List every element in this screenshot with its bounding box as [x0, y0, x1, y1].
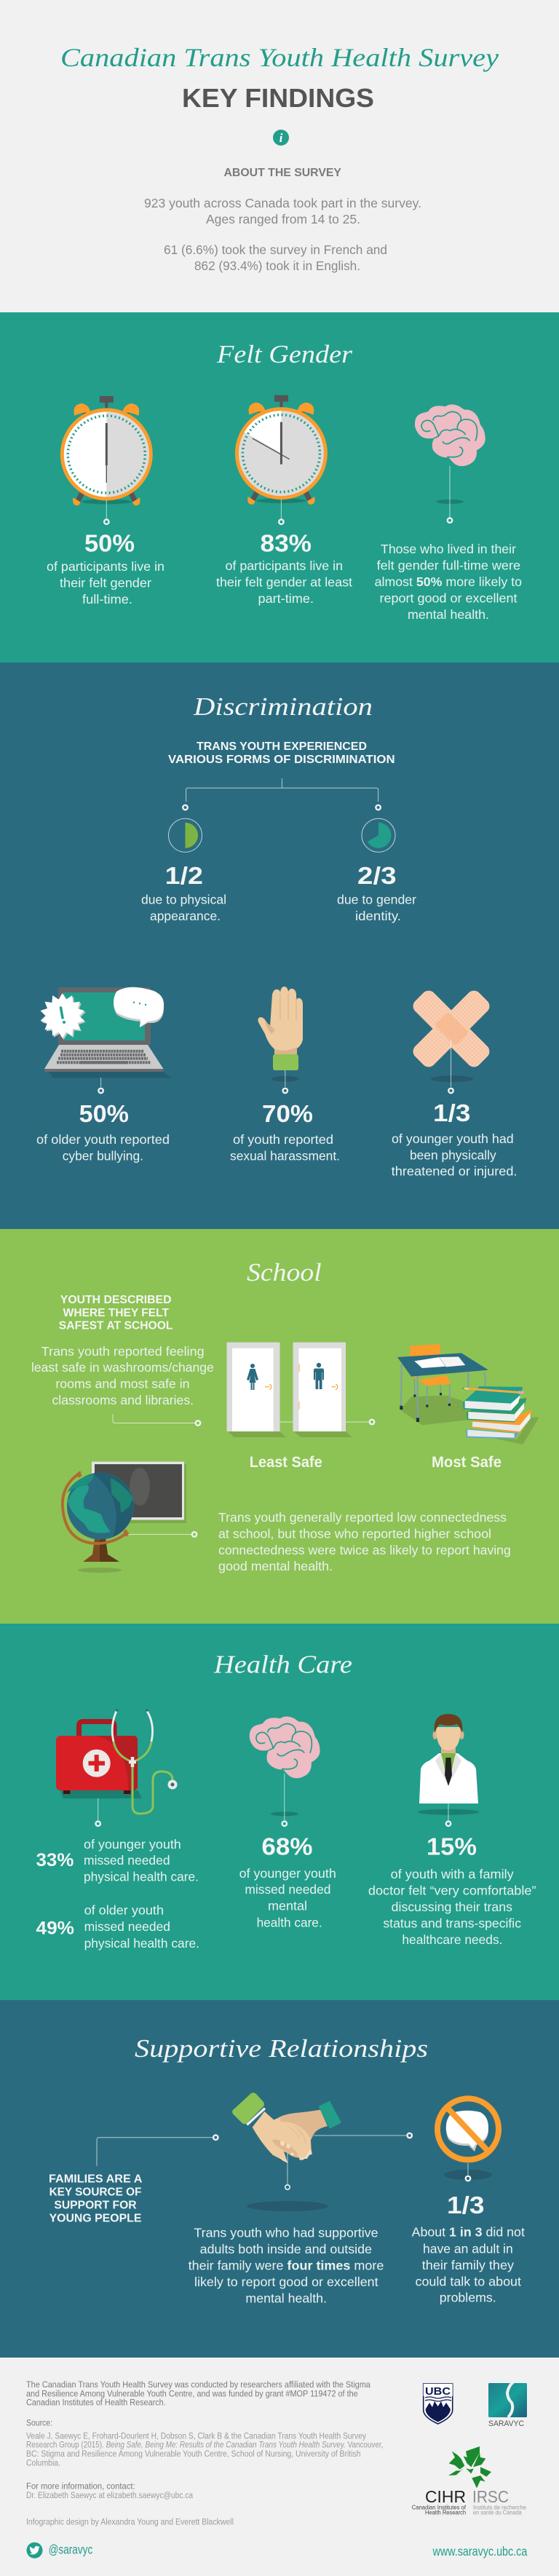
stat: 49% older youth: of older youth: [84, 1903, 164, 1918]
subtitle: key findings: KEY FINDINGS: [182, 83, 374, 113]
text: contact: For more information, contact:: [26, 2481, 135, 2492]
logo: CIHR IRSC: CIHR: [425, 2487, 466, 2506]
stat: 15%: doctor felt “very comfortable”: [368, 1884, 536, 1898]
connector: [98, 1078, 103, 1093]
stat: 2/3: 2/3: [357, 862, 397, 889]
panel: footer: [0, 2358, 559, 2576]
stat: 50%: their felt gender: [60, 576, 151, 590]
stat: 1/3: [392, 1099, 518, 1179]
about the survey text: Ages ranged from 14 to 25.: [206, 212, 360, 226]
icon: twitter: [26, 2543, 42, 2559]
stat: 1/2: due to physical: [141, 893, 226, 907]
stat: 50%: of participants live in: [47, 559, 164, 574]
connector: tree: [183, 778, 381, 810]
connector: [104, 500, 109, 524]
about the survey text: [144, 196, 421, 273]
panel: discrimination: [0, 663, 559, 1229]
stat: 83%: of participants live in: [226, 558, 343, 573]
text: safest places: [31, 1344, 214, 1407]
logo: CIHR IRSC: IRSC: [472, 2487, 509, 2506]
logo: CIHR IRSC: en santé du Canada: [473, 2509, 522, 2516]
stat: 49% older youth: [36, 1903, 199, 1951]
text: funding statement: [26, 2379, 370, 2408]
text: source: Research Group (2015). Being Safe, Being Me: Results of the Canadian Trans Youth Health Survey. Vancouver,: [26, 2440, 383, 2450]
icon: handshake: [232, 2093, 341, 2162]
chart: one half pie: [169, 818, 202, 852]
stat: 68%: of younger youth: [239, 1866, 336, 1881]
label: least safe: Least Safe: [250, 1454, 322, 1471]
stat: 1/3: threatened or injured.: [392, 1164, 518, 1179]
text: mental health finding: mental health.: [408, 607, 489, 622]
stat: 68%: health care.: [257, 1915, 322, 1929]
stat: 1/3: 1/3: [447, 2192, 485, 2219]
stat: 1/2: appearance.: [150, 909, 221, 923]
stat: 1/3: 1/3: [433, 1099, 470, 1126]
subheading: TRANS YOUTH EXPERIENCED: [197, 740, 367, 753]
connector: [128, 1532, 197, 1537]
panel: health care: [0, 1624, 559, 2000]
stat: 83%: part-time.: [258, 591, 314, 606]
stat: 33% younger youth: of younger youth: [84, 1837, 181, 1852]
panel: felt gender: [0, 312, 559, 663]
stat: 33% younger youth: physical health care.: [84, 1870, 199, 1884]
label: most safe: Most Safe: [432, 1454, 501, 1471]
subheading: families: YOUNG PEOPLE: [49, 2212, 141, 2224]
text: source: Source:: [26, 2418, 52, 2428]
text: connectedness finding: connectedness were twice as likely to report having: [218, 1543, 511, 1557]
text: safest places: least safe in washrooms/change: [31, 1360, 214, 1375]
text: source: Veale J, Saewyc E, Frohard-Dourlent H, Dobson S, Clark B & the Canadian Trans Youth Health Survey: [26, 2430, 367, 2441]
icon: clock half white: [62, 396, 151, 505]
icon: info: [273, 130, 289, 146]
subheading: families: KEY SOURCE OF: [49, 2186, 141, 2198]
stat: 1/3: their family they: [422, 2258, 514, 2272]
icon: doctor: [418, 1714, 479, 1815]
chart: two thirds pie: [362, 818, 395, 852]
about the survey text: 862 (93.4%) took it in English.: [194, 258, 360, 273]
subheading: SAFEST AT SCHOOL: [59, 1320, 173, 1332]
stat: 15%: [368, 1833, 536, 1947]
stat: 15%: discussing their trans: [392, 1900, 512, 1914]
stat: 50%: [47, 530, 164, 607]
logo: UBC: [424, 2384, 453, 2424]
stat: 2/3: due to gender: [337, 893, 416, 907]
text: connectedness finding: [218, 1510, 511, 1573]
connector: [97, 2135, 218, 2166]
text: source: [26, 2418, 383, 2468]
text: connectedness finding: at school, but those who reported higher school: [218, 1526, 491, 1541]
icon: clock 83 percent: [237, 395, 325, 504]
stat: 1/3: could talk to about: [415, 2274, 521, 2288]
subheading: families: FAMILIES ARE A: [49, 2173, 142, 2185]
text: mental health finding: report good or excellent: [380, 591, 518, 606]
heading: discrimination: Discrimination: [193, 692, 373, 721]
text: connectedness finding: good mental health.: [218, 1559, 333, 1573]
text: funding statement: The Canadian Trans Youth Health Survey was conducted by researchers affiliated with the Stigma: [26, 2379, 370, 2390]
text: mental health finding: almost 50% more likely to: [375, 574, 522, 589]
stat: 50% cyber bullying: 50%: [79, 1100, 129, 1127]
subheading: [168, 740, 395, 766]
stat: 49% older youth: physical health care.: [84, 1936, 199, 1951]
text: contact: [26, 2481, 193, 2500]
connector: [279, 499, 284, 524]
text: contact: Dr. Elizabeth Saewyc at elizabeth.saewyc@ubc.ca: [26, 2490, 193, 2500]
stat: 70%: 70%: [262, 1100, 313, 1127]
connector: [271, 1774, 298, 1826]
stat: 83%: [216, 530, 352, 606]
stat: 15%: of youth with a family: [391, 1867, 514, 1881]
stat: 1/3: problems.: [440, 2291, 496, 2305]
about the survey text: 61 (6.6%) took the survey in French and: [164, 242, 387, 257]
connector: [113, 1414, 200, 1426]
connector: [283, 1070, 288, 1093]
logo: UBC: UBC: [425, 2385, 451, 2398]
logo: SARAVYC: SARAVYC: [488, 2419, 524, 2428]
stat: 33% younger youth: missed needed: [84, 1853, 170, 1868]
panel: school: [0, 1229, 559, 1624]
text: funding statement: Canadian Institutes of Health Research.: [26, 2398, 166, 2408]
subheading: families: [49, 2173, 142, 2224]
subheading: VARIOUS FORMS OF DISCRIMINATION: [168, 754, 395, 766]
text: four times finding: adults both inside and outside: [200, 2242, 372, 2256]
stat: 50%: full-time.: [82, 592, 132, 607]
logo: CIHR IRSC: [412, 2446, 526, 2516]
icon: laptop with alerts: [40, 987, 171, 1078]
text: connectedness finding: Trans youth generally reported low connectedness: [218, 1510, 507, 1525]
stat: 33% younger youth: 33%: [36, 1850, 74, 1870]
subheading: YOUTH DESCRIBED: [60, 1294, 172, 1306]
stat: 1/2: [141, 862, 226, 923]
stat: 2/3: identity.: [355, 909, 401, 923]
stat: 50%: 50%: [84, 530, 135, 557]
connector: [446, 1803, 451, 1826]
stat: 49% older youth: 49%: [36, 1919, 74, 1939]
heading: health care: Health Care: [213, 1651, 352, 1679]
text: mental health finding: felt gender full-time were: [377, 558, 520, 572]
connector: [448, 1040, 453, 1093]
about the survey text: 923 youth across Canada took part in the survey.: [144, 196, 421, 210]
heading: felt gender: Felt Gender: [216, 340, 352, 368]
stat: 1/2: 1/2: [165, 862, 203, 889]
heading: school: School: [247, 1258, 322, 1287]
stat: 1/3: [412, 2192, 525, 2305]
icon: raised hand: [258, 987, 303, 1082]
stat: 49% older youth: missed needed: [84, 1919, 170, 1934]
logo: CIHR IRSC: Health Research: [425, 2509, 466, 2516]
stat: 83%: their felt gender at least: [216, 575, 352, 590]
icon: desk, chair and books: [397, 1344, 539, 1445]
text: safest places: classrooms and libraries.: [52, 1393, 194, 1407]
text: funding statement: and Resilience Among Vulnerable Youth Centre, and was funded by grant #MOP 119472 of the: [26, 2388, 358, 2398]
logo: CIHR IRSC: Canadian Institutes of: [412, 2504, 467, 2510]
heading: supportive relationships: Supportive Relationships: [135, 2034, 428, 2063]
icon: washroom doors: [227, 1343, 352, 1437]
text: source: Columbia.: [26, 2457, 60, 2468]
text: four times finding: [189, 2226, 384, 2305]
icon: brain: [415, 404, 485, 466]
stat: 70%: [230, 1100, 340, 1163]
connector: [436, 466, 464, 523]
text: mental health finding: [375, 542, 522, 622]
icon: brain: [250, 1716, 320, 1778]
stat: 68%: 68%: [261, 1833, 313, 1860]
stat: 15%: 15%: [427, 1833, 477, 1860]
stat: 70%: sexual harassment.: [230, 1149, 340, 1163]
icon: no talking sign: [437, 2098, 499, 2181]
icon: globe and blackboard: [63, 1462, 186, 1573]
text: four times finding: Trans youth who had supportive: [194, 2226, 378, 2240]
subheading: families: SUPPORT FOR: [54, 2199, 137, 2211]
title: Canadian Trans Youth Health Survey: [60, 43, 499, 72]
stat: 50% cyber bullying: of older youth reported: [36, 1132, 170, 1147]
stat: 15%: healthcare needs.: [402, 1932, 502, 1947]
connector: [280, 1420, 374, 1424]
stat: 2/3: [337, 862, 416, 923]
icon: crossed bandages: [410, 987, 493, 1082]
stat: 1/3: been physically: [410, 1147, 496, 1162]
stat: 68%: mental: [268, 1899, 307, 1913]
stat: 70%: of youth reported: [233, 1132, 333, 1147]
stat: 68%: [239, 1833, 336, 1929]
text: mental health finding: Those who lived in their: [381, 542, 516, 556]
text: safest places: Trans youth reported feeling: [41, 1344, 205, 1359]
connector: [247, 2133, 412, 2211]
text: four times finding: likely to report good or excellent: [194, 2275, 378, 2289]
panel: supportive relationships: [0, 2000, 559, 2358]
text: four times finding: their family were four times more: [189, 2259, 384, 2273]
text: twitter handle: @saravyc: [49, 2543, 92, 2557]
subheading: WHERE THEY FELT: [63, 1307, 170, 1319]
icon: info: i: [280, 131, 283, 145]
subheading: [59, 1294, 173, 1332]
stat: 50% cyber bullying: [36, 1100, 170, 1163]
stat: 15%: status and trans-specific: [383, 1916, 521, 1931]
logo: CIHR IRSC: Instituts de recherche: [473, 2504, 526, 2510]
logo: SARAVYC: [488, 2379, 527, 2428]
text: website: www.saravyc.ubc.ca: [432, 2544, 528, 2559]
stat: 1/3: About 1 in 3 did not: [412, 2225, 525, 2240]
stat: 1/3: have an adult in: [423, 2241, 513, 2256]
stat: 1/3: of younger youth had: [392, 1131, 514, 1146]
stat: 50% cyber bullying: cyber bullying.: [63, 1149, 143, 1163]
text: design credit: Infographic design by Alexandra Young and Everett Blackwell: [26, 2517, 234, 2527]
connector: [96, 1798, 100, 1826]
text: source: BC: Stigma and Resilience Among Vulnerable Youth Centre, School of Nursing, University of British: [26, 2449, 361, 2459]
stat: 33% younger youth: [36, 1837, 199, 1884]
text: safest places: rooms and most safe in: [55, 1376, 190, 1391]
panel: header and about the survey: [0, 0, 559, 312]
icon: medical bag with stethoscope: [56, 1709, 178, 1814]
stat: 68%: missed needed: [245, 1882, 330, 1897]
about the survey heading: ABOUT THE SURVEY: [224, 167, 342, 179]
text: four times finding: mental health.: [245, 2291, 327, 2305]
stat: 83%: 83%: [261, 530, 312, 557]
